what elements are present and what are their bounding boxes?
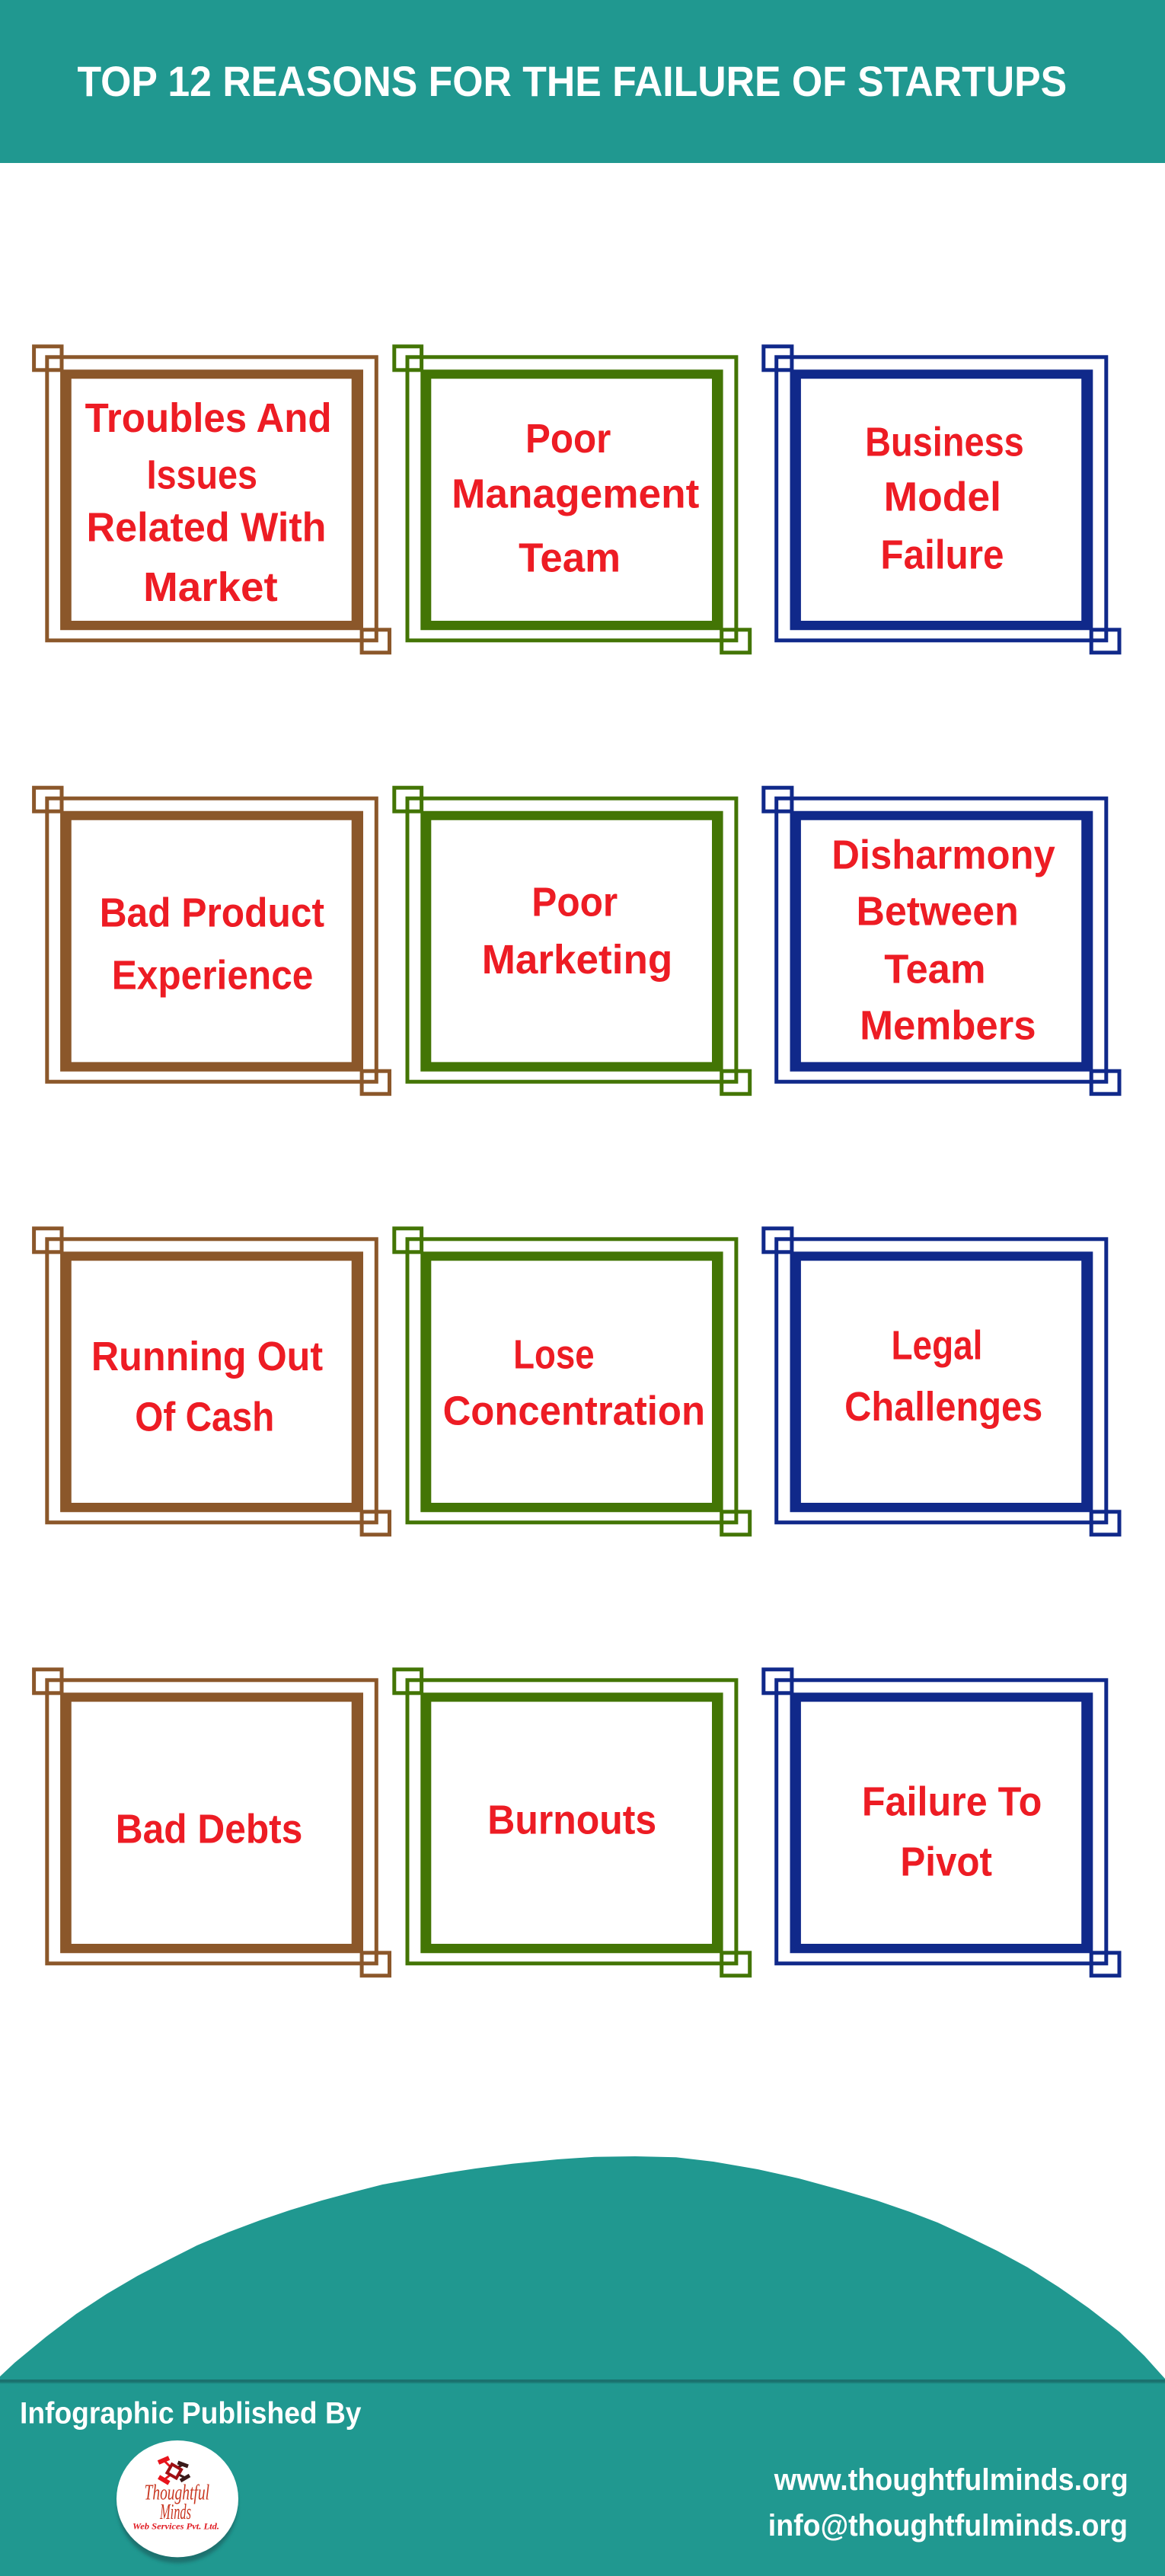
- card text: Burnouts: [487, 1798, 656, 1843]
- card: Burnouts: [394, 1670, 750, 1976]
- card text: Concentration: [443, 1389, 705, 1434]
- card text: Bad Product: [100, 890, 324, 936]
- card text: Model: [884, 475, 1001, 520]
- card text: Business: [865, 420, 1024, 465]
- logo wordmark: Web Services Pvt. Ltd.: [132, 2521, 219, 2532]
- card: Poor Marketing: [394, 788, 750, 1094]
- card text: Pivot: [900, 1839, 992, 1885]
- card: Poor Management Team: [394, 347, 750, 653]
- card text: Team: [884, 947, 986, 992]
- card text: Of Cash: [135, 1395, 274, 1440]
- card: Disharmony Between Team Members: [764, 788, 1119, 1094]
- card text: [482, 880, 672, 983]
- website: www.thoughtfulminds.org: [774, 2463, 1128, 2497]
- card text: Bad Debts: [116, 1806, 302, 1852]
- icon: logo mark: [158, 2458, 190, 2483]
- card text: [91, 1334, 323, 1440]
- card text: [844, 1322, 1042, 1430]
- card text: Poor: [531, 880, 618, 925]
- card text: Failure: [880, 532, 1004, 578]
- card: Troubles And Issues Related With Market: [34, 347, 389, 653]
- logo wordmark: Minds: [159, 2501, 191, 2524]
- card text: Disharmony: [831, 833, 1055, 878]
- card text: Issues: [147, 452, 257, 498]
- card text: [865, 420, 1024, 578]
- card text: [443, 1332, 705, 1434]
- card text: Market: [143, 564, 278, 610]
- card: Legal Challenges: [764, 1229, 1119, 1535]
- card text: Troubles And: [85, 395, 332, 441]
- card text: Experience: [112, 953, 313, 999]
- card text: Team: [519, 535, 621, 581]
- card text: Legal: [891, 1322, 982, 1368]
- card text: Members: [860, 1003, 1036, 1049]
- card: Bad Product Experience: [34, 788, 389, 1094]
- card text: Lose: [513, 1332, 595, 1378]
- card text: [85, 395, 332, 610]
- card text: Management: [452, 471, 699, 517]
- header banner: [0, 0, 1165, 163]
- footer heading: Infographic Published By: [20, 2397, 362, 2431]
- card text: Challenges: [844, 1384, 1042, 1430]
- card text: Marketing: [482, 937, 672, 983]
- card text: Related With: [87, 505, 326, 551]
- logo badge: [116, 2440, 238, 2563]
- card: Running Out Of Cash: [34, 1229, 389, 1535]
- card text: [452, 416, 699, 581]
- card text: [862, 1779, 1042, 1885]
- card text: Poor: [525, 416, 611, 462]
- title: TOP 12 REASONS FOR THE FAILURE OF STARTUPS: [78, 57, 1067, 105]
- card: Failure To Pivot: [764, 1670, 1119, 1976]
- teal hill shape: [0, 2156, 1165, 2384]
- logo wordmark: [132, 2481, 219, 2532]
- card text: [100, 890, 324, 999]
- card text: Running Out: [91, 1334, 323, 1379]
- card: Business Model Failure: [764, 347, 1119, 653]
- email: info@thoughtfulminds.org: [768, 2509, 1128, 2542]
- footer band: [0, 2379, 1165, 2576]
- card text: Failure To: [862, 1779, 1042, 1825]
- card text: Between: [856, 889, 1019, 935]
- card: Bad Debts: [34, 1670, 389, 1976]
- card: Lose Concentration: [394, 1229, 750, 1535]
- logo wordmark: Thoughtful: [145, 2481, 209, 2505]
- card text: [831, 833, 1055, 1049]
